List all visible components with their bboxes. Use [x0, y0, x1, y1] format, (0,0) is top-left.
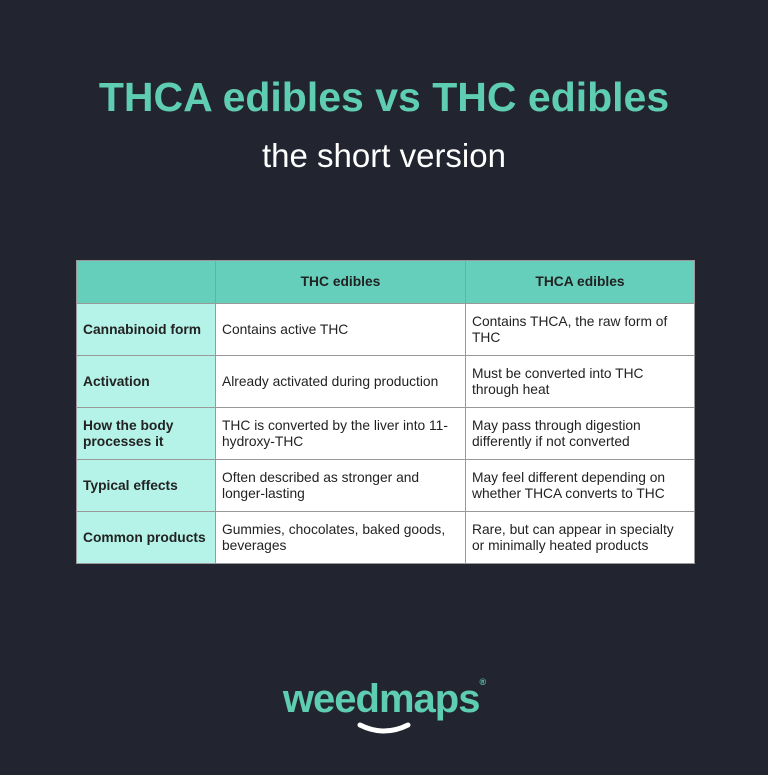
comparison table: Contains active THC: [222, 322, 348, 336]
comparison table: May feel different depending on whether THCA converts to THC: [472, 470, 665, 500]
logo: weedmaps: weedmaps®: [283, 677, 485, 721]
comparison table: [76, 260, 695, 564]
comparison table: THCA edibles: [535, 274, 625, 289]
comparison table: Typical effects: [83, 478, 178, 492]
comparison table: THC is converted by the liver into 11-hydroxy-THC: [222, 418, 448, 448]
comparison table: Rare, but can appear in specialty or minimally heated products: [472, 522, 674, 552]
comparison table: THC edibles: [301, 274, 380, 289]
comparison table: Often described as stronger and longer-lasting: [222, 470, 419, 500]
comparison table: Already activated during production: [222, 374, 438, 388]
comparison table: Gummies, chocolates, baked goods, beverages: [222, 522, 445, 552]
title: THCA edibles vs THC edibles: [99, 74, 669, 120]
comparison table: Common products: [83, 530, 206, 544]
comparison table: May pass through digestion differently if not converted: [472, 418, 641, 448]
comparison table: Contains THCA, the raw form of THC: [472, 314, 667, 344]
comparison table: Must be converted into THC through heat: [472, 366, 644, 396]
comparison table: How the body processes it: [83, 418, 173, 448]
comparison table: Cannabinoid form: [83, 322, 201, 336]
comparison table: Activation: [83, 374, 150, 388]
subtitle: the short version: [262, 137, 506, 174]
